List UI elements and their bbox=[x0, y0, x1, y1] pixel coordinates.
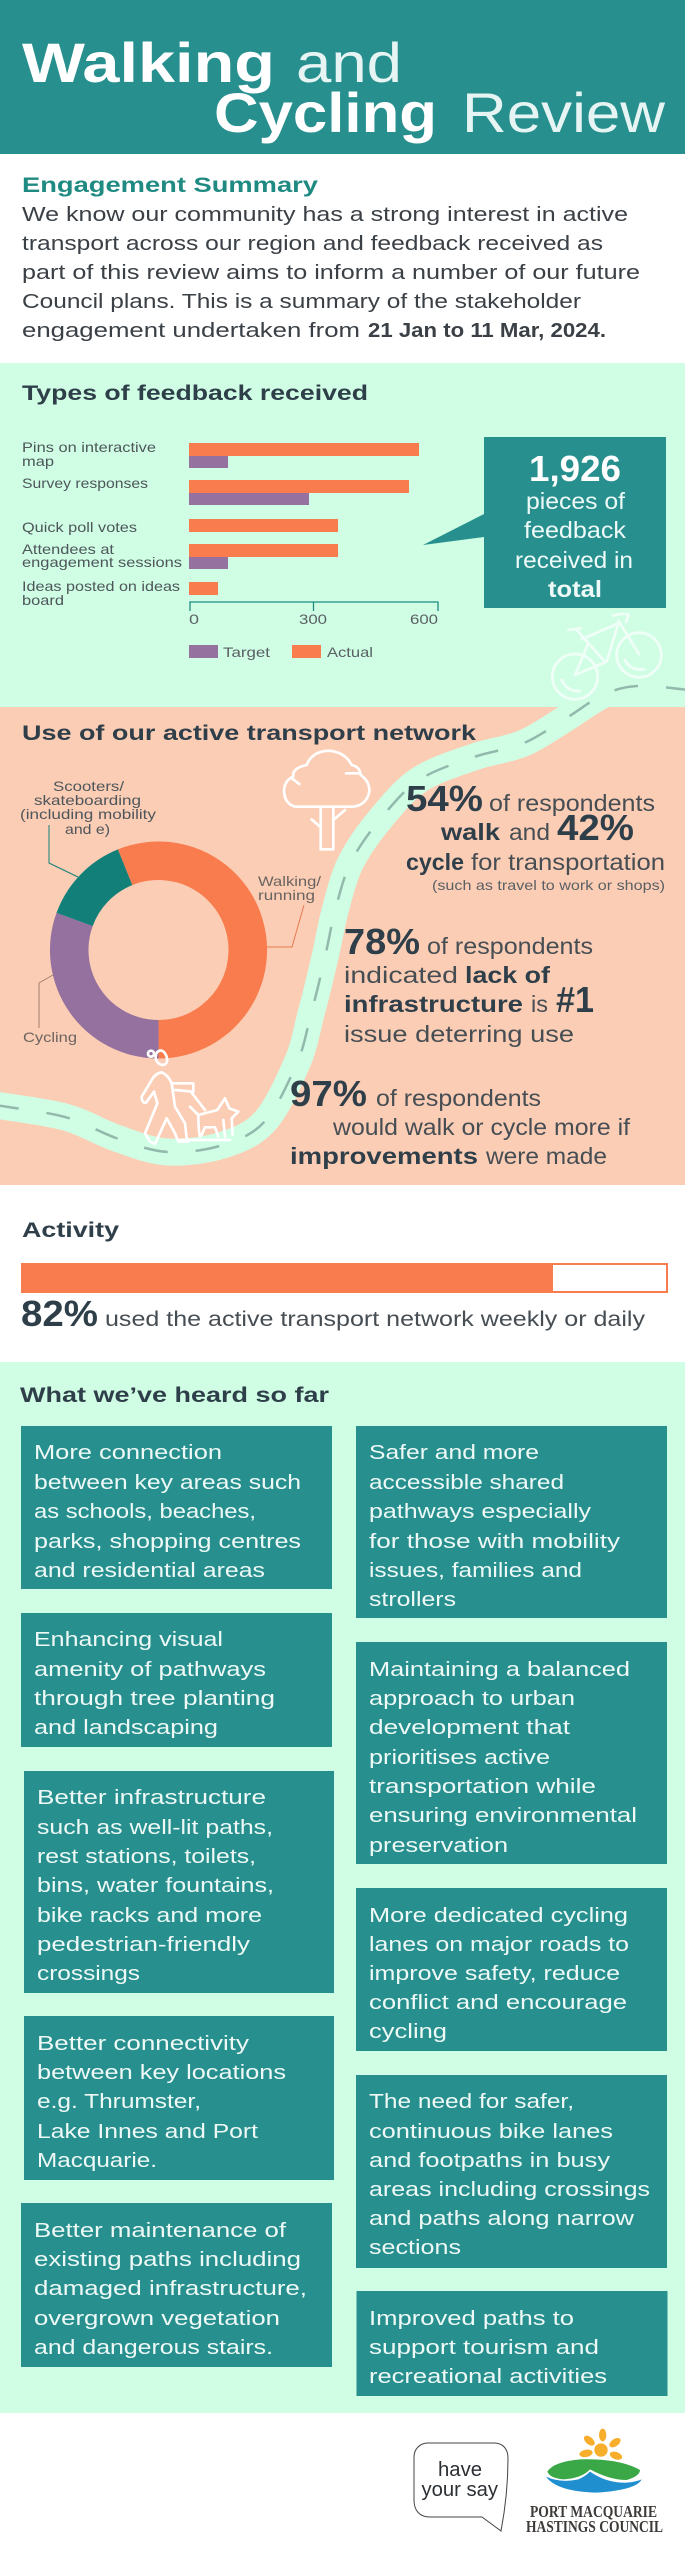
label: cycling: Cycling bbox=[23, 1029, 77, 1045]
axis: 300 bbox=[299, 611, 327, 627]
card: enhancing amenity: through tree planting bbox=[34, 1688, 275, 1710]
stat: 97 percent bbox=[290, 1073, 631, 1169]
card: enhancing amenity: and landscaping bbox=[34, 1717, 218, 1739]
stat: 78 percent: of respondents bbox=[427, 933, 593, 959]
stat: 97 percent: would walk or cycle more if bbox=[332, 1114, 631, 1140]
card: better infrastructure: such as well-lit paths, bbox=[37, 1817, 273, 1839]
card: safer continuous lanes: sections bbox=[369, 2237, 461, 2259]
title: and bbox=[296, 31, 402, 94]
title: Review bbox=[462, 81, 666, 144]
card: dedicated cycling lanes: lanes on major roads to bbox=[369, 1934, 629, 1956]
card: safer shared pathways: issues, families and bbox=[369, 1560, 582, 1582]
card: better maintenance: Better maintenance of bbox=[34, 2220, 287, 2242]
label: scooters: Scooters/ bbox=[53, 778, 124, 794]
bars bbox=[189, 443, 419, 595]
card: safer shared pathways: pathways especially bbox=[369, 1501, 591, 1523]
legend: Actual bbox=[327, 644, 373, 660]
card: better maintenance: overgrown vegetation bbox=[34, 2308, 280, 2330]
card: more connection: parks, shopping centres bbox=[34, 1531, 301, 1553]
heading: engagement summary: Engagement Summary bbox=[22, 174, 318, 197]
logo mark bbox=[546, 2429, 642, 2493]
card: better connectivity: Lake Innes and Port bbox=[37, 2121, 259, 2143]
stat: 97 percent: were made bbox=[485, 1143, 607, 1169]
heading: what we've heard: What we’ve heard so far bbox=[20, 1384, 329, 1407]
card: balanced approach: approach to urban bbox=[369, 1688, 575, 1710]
card: tourism paths: Improved paths to bbox=[369, 2308, 574, 2330]
card: safer shared pathways: strollers bbox=[369, 1589, 456, 1611]
card: dedicated cycling lanes: More dedicated cycling bbox=[369, 1905, 628, 1927]
callout: total feedback: total bbox=[548, 576, 602, 602]
heading: activity: Activity bbox=[22, 1219, 119, 1242]
axis: 0 bbox=[189, 611, 199, 627]
category labels: board bbox=[22, 592, 64, 608]
card: balanced approach bbox=[356, 1642, 667, 1864]
stat: 97 percent: improvements bbox=[290, 1143, 478, 1169]
axis: 600 bbox=[410, 611, 438, 627]
card: better connectivity: between key locations bbox=[37, 2062, 286, 2084]
summary text: We know our community has a strong interest in active bbox=[22, 203, 628, 226]
heading: types of feedback: Types of feedback received bbox=[22, 382, 368, 405]
card: tourism paths: support tourism and bbox=[369, 2337, 599, 2359]
category labels: Ideas posted on ideas bbox=[22, 578, 180, 594]
logo: Port Macquarie Hastings Council: PORT MACQUARIE bbox=[530, 2502, 657, 2521]
stat: 78 percent: is bbox=[531, 991, 548, 1017]
card: dedicated cycling lanes: cycling bbox=[369, 2021, 447, 2043]
label: scooters: (including mobility bbox=[20, 806, 156, 822]
panel: network background bbox=[0, 707, 685, 1185]
stat: 54 percent: cycle bbox=[406, 849, 464, 875]
category labels: Attendees at bbox=[22, 541, 114, 557]
category labels: Survey responses bbox=[22, 475, 148, 491]
axis bbox=[189, 602, 438, 627]
card: more connection bbox=[21, 1426, 332, 1589]
heading: network use: Use of our active transport network bbox=[22, 722, 476, 745]
stat: 97 percent: of respondents bbox=[376, 1085, 541, 1111]
card: more connection: and residential areas bbox=[34, 1560, 265, 1582]
card: better maintenance bbox=[21, 2203, 332, 2367]
stat: 78 percent: issue deterring use bbox=[344, 1021, 574, 1047]
card: better connectivity: Macquarie. bbox=[37, 2150, 157, 2172]
callout: total feedback: pieces of bbox=[526, 488, 626, 514]
title bbox=[22, 31, 666, 144]
icon: have your say bubble bbox=[414, 2443, 508, 2531]
stat: 54 percent: 54% bbox=[406, 778, 483, 819]
label: walking bbox=[258, 873, 321, 903]
callout: total feedback: received in bbox=[515, 547, 633, 573]
card: enhancing amenity bbox=[21, 1613, 332, 1747]
engagement summary bbox=[22, 174, 640, 342]
stat: 97 percent: 97% bbox=[290, 1073, 367, 1114]
card: dedicated cycling lanes bbox=[356, 1888, 667, 2051]
stat: 78 percent: indicated bbox=[344, 962, 458, 988]
card: safer continuous lanes: areas including crossings bbox=[369, 2179, 650, 2201]
label: scooters: skateboarding bbox=[34, 792, 141, 808]
stat: 54 percent: 42% bbox=[557, 807, 634, 848]
stat: 82 percent: 82% bbox=[21, 1293, 98, 1334]
panel: heard so far background bbox=[0, 1362, 685, 2413]
card: dedicated cycling lanes: improve safety, reduce bbox=[369, 1963, 620, 1985]
title: Walking bbox=[22, 31, 275, 94]
card: balanced approach: ensuring environmental bbox=[369, 1805, 637, 1827]
icon: bicycle bbox=[552, 614, 661, 699]
card: tourism paths bbox=[356, 2291, 668, 2396]
stat: 78 percent: infrastructure bbox=[344, 991, 523, 1017]
card: better infrastructure: crossings bbox=[37, 1963, 140, 1985]
card: better connectivity: Better connectivity bbox=[37, 2033, 249, 2055]
card: safer shared pathways bbox=[356, 1426, 667, 1618]
card: tourism paths: recreational activities bbox=[369, 2366, 607, 2388]
summary text: engagement undertaken from bbox=[22, 319, 360, 342]
card: safer continuous lanes: and footpaths in busy bbox=[369, 2150, 610, 2172]
label: scooters bbox=[20, 778, 156, 837]
card: better infrastructure bbox=[24, 1771, 334, 1993]
card: better infrastructure: rest stations, toilets, bbox=[37, 1846, 256, 1868]
header banner bbox=[0, 0, 685, 154]
summary text: Council plans. This is a summary of the stakeholder bbox=[22, 290, 581, 313]
card: better maintenance: damaged infrastructure, bbox=[34, 2278, 307, 2300]
icon: have your say bubble: have bbox=[438, 2459, 482, 2481]
category labels: Quick poll votes bbox=[22, 519, 137, 535]
stat: 54 percent bbox=[406, 778, 665, 893]
leader lines bbox=[39, 825, 304, 1028]
card: enhancing amenity: Enhancing visual bbox=[34, 1629, 223, 1651]
bar chart bbox=[22, 439, 438, 660]
card: balanced approach: prioritises active bbox=[369, 1747, 550, 1769]
panel: types of feedback background bbox=[0, 363, 685, 707]
summary text: 21 Jan to 11 Mar, 2024. bbox=[368, 319, 606, 342]
callout: total feedback: feedback bbox=[524, 517, 627, 543]
card: balanced approach: preservation bbox=[369, 1835, 508, 1857]
summary text bbox=[22, 203, 640, 342]
stat: 54 percent: for transportation bbox=[471, 849, 665, 875]
card: balanced approach: Maintaining a balanced bbox=[369, 1659, 630, 1681]
label: walking: Walking/ bbox=[258, 873, 321, 889]
callout: total feedback: 1,926 bbox=[529, 448, 621, 489]
legend bbox=[189, 644, 373, 660]
card: safer shared pathways: accessible shared bbox=[369, 1472, 564, 1494]
donut chart bbox=[20, 778, 321, 1059]
stat: 78 percent bbox=[344, 921, 594, 1047]
label: scooters: and e) bbox=[65, 821, 110, 837]
callout: total feedback bbox=[423, 437, 666, 608]
activity section bbox=[21, 1219, 667, 1334]
card: better infrastructure: Better infrastructure bbox=[37, 1787, 266, 1809]
stat: 78 percent: 78% bbox=[344, 921, 420, 962]
category labels: engagement sessions bbox=[22, 554, 182, 570]
card: balanced approach: transportation while bbox=[369, 1776, 596, 1798]
summary text: transport across our region and feedback received as bbox=[22, 232, 603, 255]
stat: 82 percent bbox=[21, 1293, 646, 1334]
label: walking: running bbox=[258, 887, 315, 903]
card: enhancing amenity: amenity of pathways bbox=[34, 1659, 266, 1681]
road path bbox=[0, 686, 685, 1152]
card: more connection: between key areas such bbox=[34, 1472, 301, 1494]
card: better connectivity: e.g. Thrumster, bbox=[37, 2091, 201, 2113]
icon: person walking dog bbox=[142, 1050, 238, 1144]
stat: 54 percent: walk bbox=[440, 819, 500, 845]
card: better maintenance: existing paths including bbox=[34, 2249, 301, 2271]
stat: 78 percent: lack of bbox=[465, 962, 550, 988]
card: dedicated cycling lanes: conflict and encourage bbox=[369, 1992, 627, 2014]
stat: 82 percent: used the active transport network weekly or daily bbox=[105, 1308, 646, 1331]
card: better infrastructure: bins, water fountains, bbox=[37, 1875, 274, 1897]
card: better maintenance: and dangerous stairs. bbox=[34, 2337, 273, 2359]
icon: tree bbox=[284, 751, 369, 849]
category labels bbox=[22, 439, 182, 608]
stat: 54 percent: and bbox=[509, 819, 550, 845]
stat: 54 percent: (such as travel to work or shops) bbox=[432, 877, 665, 893]
title: Cycling bbox=[214, 81, 437, 144]
category labels: Pins on interactive bbox=[22, 439, 156, 455]
card: safer shared pathways: for those with mobility bbox=[369, 1531, 620, 1553]
card: safer continuous lanes bbox=[356, 2075, 667, 2268]
legend: Target bbox=[223, 644, 270, 660]
stat: 78 percent: #1 bbox=[556, 979, 594, 1020]
stat: 54 percent: of respondents bbox=[489, 790, 655, 816]
card: better connectivity bbox=[24, 2016, 334, 2180]
card: better infrastructure: pedestrian-friendly bbox=[37, 1934, 250, 1956]
progress bar bbox=[21, 1263, 667, 1292]
card: safer continuous lanes: The need for safer, bbox=[369, 2091, 574, 2113]
category labels: map bbox=[22, 453, 54, 469]
icon: have your say bubble: your say bbox=[422, 2479, 498, 2501]
card: more connection: More connection bbox=[34, 1442, 222, 1464]
card: more connection: as schools, beaches, bbox=[34, 1501, 256, 1523]
card: safer continuous lanes: continuous bike lanes bbox=[369, 2121, 613, 2143]
card: safer shared pathways: Safer and more bbox=[369, 1442, 539, 1464]
logo: Port Macquarie Hastings Council bbox=[526, 2429, 663, 2536]
summary text: part of this review aims to inform a number of our future bbox=[22, 261, 640, 284]
card: safer continuous lanes: and paths along narrow bbox=[369, 2208, 635, 2230]
card: balanced approach: development that bbox=[369, 1717, 571, 1739]
card: better infrastructure: bike racks and more bbox=[37, 1905, 262, 1927]
